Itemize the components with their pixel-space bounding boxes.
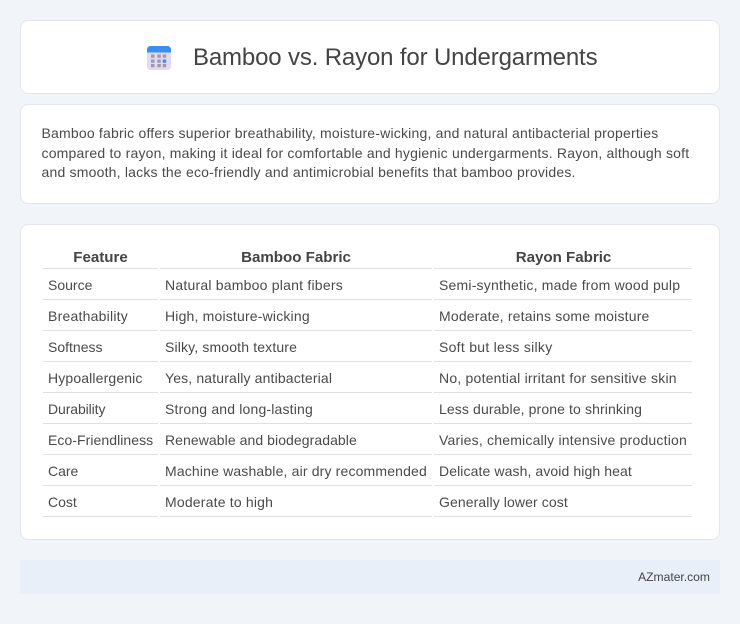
table rows: Eco-Friendliness [48,432,153,448]
footer bar [20,560,720,594]
table rows: Less durable, prone to shrinking [439,401,642,417]
table rows: No, potential irritant for sensitive skin [439,370,677,386]
icon: calendar [147,46,171,70]
table rows: Semi-synthetic, made from wood pulp [439,277,680,293]
table rows: Generally lower cost [439,494,568,510]
table rows: High, moisture-wicking [165,308,310,324]
table rows: Soft but less silky [439,339,552,355]
table rows: Cost [48,494,77,510]
comparison table panel [20,224,720,540]
table rows: Source [48,277,92,293]
summary text: and smooth, lacks the eco-friendly and antimicrobial benefits that bamboo provides. [42,164,576,180]
table rows: Care [48,463,78,479]
table rows: Varies, chemically intensive production [439,432,687,448]
title: Bamboo vs. Rayon for Undergarments [193,44,597,71]
table rows: Silky, smooth texture [165,339,297,355]
table rows: Yes, naturally antibacterial [165,370,332,386]
table rows: Moderate to high [165,494,273,510]
table rows: Softness [48,339,102,355]
table header: Bamboo Fabric [241,249,351,266]
summary text: compared to rayon, making it ideal for comfortable and hygienic undergarments. Rayon, although soft [42,144,689,160]
table rows [43,268,692,517]
table rows: Breathability [48,308,128,324]
table rows: Natural bamboo plant fibers [165,277,343,293]
summary text: Bamboo fabric offers superior breathability, moisture-wicking, and natural antibacterial properties [42,125,658,141]
summary text [42,125,690,180]
table header: Feature [73,249,128,266]
table rows: Delicate wash, avoid high heat [439,463,632,479]
table rows: Machine washable, air dry recommended [165,463,427,479]
table header: Rayon Fabric [516,249,611,266]
table rows: Hypoallergenic [48,370,143,386]
table rows: Durability [48,401,105,417]
table rows: Renewable and biodegradable [165,432,357,448]
table header [73,249,611,266]
table rows: Strong and long-lasting [165,401,313,417]
footer credit: AZmater.com [638,570,710,584]
header panel [20,20,720,94]
table rows: Moderate, retains some moisture [439,308,650,324]
summary panel [20,104,720,204]
